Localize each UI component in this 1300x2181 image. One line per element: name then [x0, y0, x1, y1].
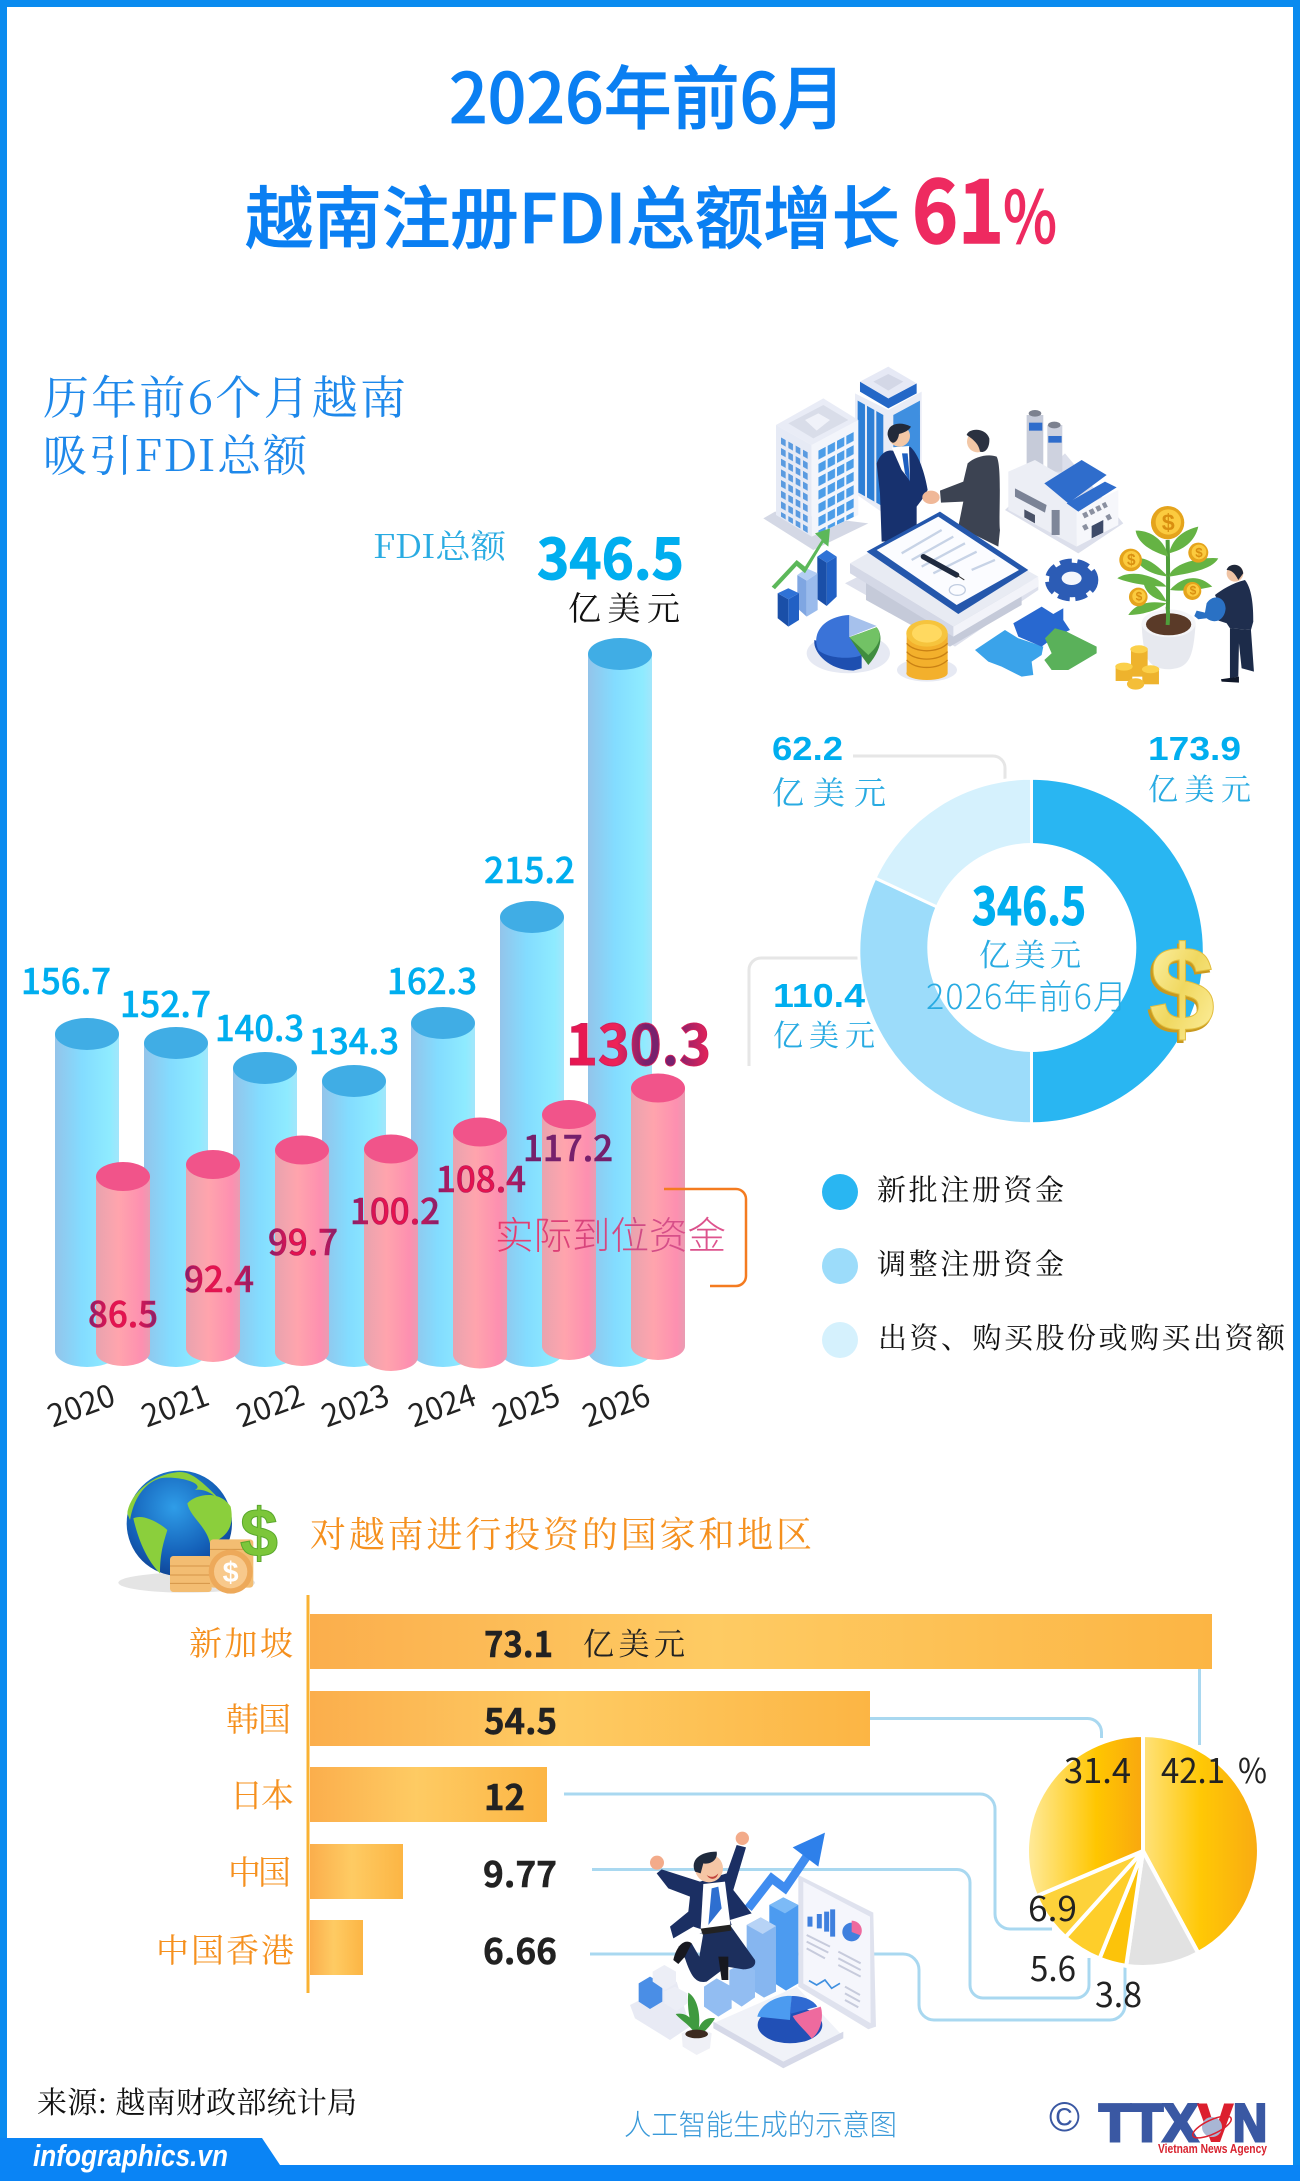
slice value: 110.4: 亿美元: [773, 1011, 875, 1055]
bar: Singapore: [189, 1614, 1212, 1669]
subheading: FDI totals over the years: 历年前6个月越南: [43, 362, 406, 428]
series: total FDI blue cylinders: [55, 638, 652, 1367]
values: realized capital: 86.5: [88, 1287, 158, 1338]
bar: China: [228, 1844, 557, 1899]
bar: South Korea: 54.5: [484, 1694, 557, 1745]
legend item: capital contribution: 出资、购买股份或购买出资额: [878, 1316, 1286, 1357]
values: total FDI: 156.7: [21, 954, 111, 1005]
slice value: 62.2: 亿美元: [772, 768, 886, 814]
years axis: 2020: [40, 1370, 120, 1436]
years axis: 2024: [401, 1370, 481, 1436]
title: 2026年前6月: [449, 43, 846, 143]
values: total FDI: 162.3: [387, 954, 477, 1005]
pie labels: 5.6: [1030, 1942, 1076, 1991]
slice value: 173.9: [1148, 730, 1251, 809]
values: realized capital: 99.7: [268, 1215, 338, 1266]
slice value: 110.4: 110.4: [773, 977, 866, 1014]
pie labels: 6.9: [1028, 1882, 1077, 1931]
logo: TTXVN: V: [1198, 2094, 1233, 2153]
pie labels: %: [1238, 1744, 1267, 1793]
bar: Japan: 12: [484, 1770, 525, 1821]
slice value: 62.2: 62.2: [772, 730, 843, 767]
bar: Hong Kong: 6.66: [483, 1924, 557, 1975]
bar: South Korea: 韩国: [226, 1694, 291, 1741]
pie labels: [1028, 1744, 1267, 2017]
values: total FDI: [21, 843, 575, 1065]
pie labels: 42.1: [1161, 1744, 1225, 1793]
illustration: business handshake: $: [1162, 510, 1175, 536]
legend item: adjusted: 调整注册资金: [877, 1242, 1064, 1283]
footer band: infographics.vn: [33, 2138, 228, 2173]
bar: Singapore: 73.1: [484, 1617, 553, 1668]
source: 来源: 越南财政部统计局: [37, 2078, 357, 2122]
bar: Singapore: 新加坡: [189, 1618, 293, 1665]
legend item: newly registered: 新批注册资金: [877, 1168, 1064, 1209]
bar: China: 9.77: [483, 1847, 557, 1898]
pie chart: share by investor: [1027, 1735, 1267, 2017]
years axis: 2022: [229, 1370, 309, 1436]
bar: Singapore: 亿美元: [583, 1619, 685, 1664]
years axis: 2021: [134, 1370, 214, 1436]
footer band: [0, 2138, 1300, 2181]
illustration: business handshake: $: [1136, 590, 1143, 604]
bar: Japan: [230, 1767, 547, 1822]
center total: 亿美元: [979, 930, 1081, 975]
label: realized capital: 实际到位资金: [495, 1205, 726, 1260]
slice value: 173.9: 亿美元: [1148, 765, 1251, 809]
axis: [306, 1595, 310, 1993]
title: [245, 43, 1057, 268]
note: AI illustration: 人工智能生成的示意图: [624, 2102, 897, 2144]
bar: China: 中国: [228, 1847, 291, 1894]
values: total FDI: 152.7: [120, 977, 211, 1028]
logo: TTXVN: [1099, 2094, 1268, 2156]
center total: 2026年前6月: [926, 970, 1127, 1019]
illustration: business handshake: $: [1190, 584, 1197, 598]
values: realized capital: [88, 1121, 613, 1338]
logo: TTXVN: N: [1233, 2094, 1267, 2153]
series: realized capital pink cylinders: [96, 1074, 685, 1371]
center hole: [927, 843, 1136, 1052]
values: total FDI: 140.3: [215, 1001, 304, 1052]
pie labels: 3.8: [1095, 1968, 1142, 2017]
label: FDI total: FDI总额: [373, 521, 507, 568]
logo: TTXVN: Vietnam News Agency: [1158, 2141, 1268, 2156]
copyright mark: ©: [1049, 2093, 1080, 2140]
connectors: [749, 756, 1005, 1066]
illustration: jumping businessman: [630, 1832, 876, 2068]
title: %: [1003, 159, 1057, 264]
illustration: business handshake: [763, 367, 1254, 690]
values: realized capital: 108.4: [436, 1152, 526, 1203]
pie slices: [1027, 1735, 1259, 1967]
slice value: 110.4: [773, 977, 875, 1055]
bracket: [664, 1189, 746, 1286]
bar chart: investors: [156, 1595, 1212, 1993]
title: 越南注册FDI总额增长: [245, 164, 900, 263]
bar: Hong Kong: 中国香港: [156, 1925, 294, 1972]
slice value: 173.9: 173.9: [1148, 730, 1241, 767]
heading: investors: 对越南进行投资的国家和地区: [310, 1507, 812, 1558]
center total: [926, 865, 1127, 1019]
center total: 346.5: [972, 865, 1086, 940]
illustration: business handshake: $: [1127, 552, 1136, 569]
illustration: business handshake: $: [1195, 545, 1203, 560]
value: 346.5: 346.5: [537, 515, 684, 596]
bar: South Korea: [226, 1691, 870, 1746]
values: realized capital: 117.2: [523, 1121, 613, 1172]
value: 2026 realized capital: 130.3: [566, 1001, 711, 1082]
years axis: [40, 1370, 655, 1436]
icon: globe and coins: $: [223, 1557, 239, 1589]
connectors: bars to pie: [564, 1669, 1200, 2020]
slice value: 62.2: [772, 730, 886, 814]
title: 61: [912, 143, 1004, 268]
slices: [859, 778, 1204, 1124]
icon: globe and coins: [118, 1471, 278, 1594]
values: realized capital: 100.2: [350, 1184, 440, 1235]
icon: gold dollar: $: [1146, 924, 1214, 1060]
legend: [822, 1168, 1286, 1358]
icon: gold dollar: $: [1149, 921, 1215, 1057]
years axis: 2023: [314, 1370, 394, 1436]
chart: FDI cylinders: [21, 638, 746, 1436]
subheading: FDI totals over the years: 吸引FDI总额: [43, 420, 308, 484]
icon: globe and coins: $: [240, 1496, 278, 1572]
bar: Hong Kong: [156, 1920, 557, 1975]
pie labels: 31.4: [1064, 1744, 1131, 1793]
subheading: FDI totals over the years: [43, 362, 406, 484]
years axis: 2026: [575, 1370, 655, 1436]
donut chart: [749, 730, 1251, 1124]
values: total FDI: 134.3: [309, 1014, 399, 1065]
unit: hundred million USD: 亿美元: [568, 583, 680, 630]
values: total FDI: 215.2: [484, 843, 575, 894]
years axis: 2025: [485, 1370, 565, 1436]
bar: Japan: 日本: [230, 1770, 294, 1817]
logo: TTXVN: TTX: [1099, 2094, 1198, 2153]
values: realized capital: 92.4: [184, 1252, 254, 1303]
